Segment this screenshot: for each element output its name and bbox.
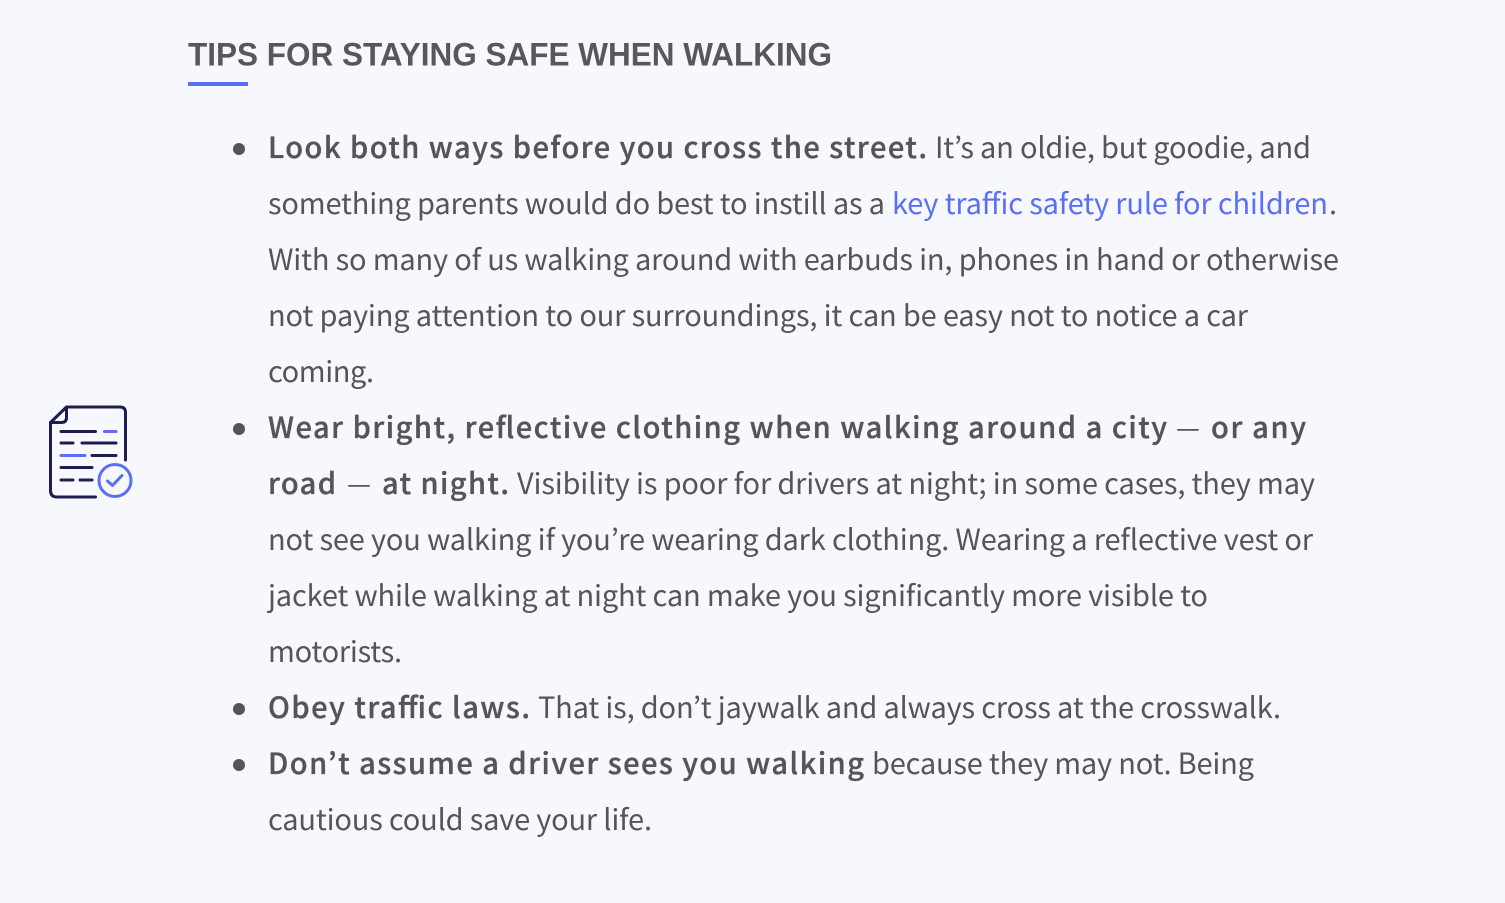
list item: don't assume: [233, 741, 1254, 839]
list item: reflective clothing: jacket while walking at night can make you significantly more visible to: [266, 573, 1208, 615]
list item: look both ways: coming.: [268, 349, 374, 391]
list item: look both ways: [233, 125, 1339, 391]
list item: look both ways: It’s an oldie, but goodie, and: [935, 125, 1311, 167]
heading: TIPS FOR STAYING SAFE WHEN WALKING: [188, 36, 832, 72]
list item: reflective clothing: —: [347, 461, 371, 503]
list item: look both ways: something parents would do best to instill as a: [268, 181, 885, 223]
list item: reflective clothing: at night.: [382, 461, 509, 503]
list item: reflective clothing: not see you walking if you’re wearing dark clothing. Wearing a reflective vest or: [268, 517, 1314, 559]
list item: reflective clothing: motorists.: [268, 629, 402, 671]
list item: obey traffic laws: That is, don’t jaywalk and always cross at the crosswalk.: [538, 685, 1281, 727]
list item: reflective clothing: or any: [1211, 405, 1306, 447]
list item: look both ways: not paying attention to our surroundings, it can be easy not to notice a car: [268, 293, 1249, 335]
bullet list: [233, 125, 1339, 839]
list item: reflective clothing: road: [268, 461, 336, 503]
list item: obey traffic laws: Obey traffic laws.: [268, 685, 530, 727]
list item: reflective clothing: [233, 405, 1315, 671]
list item: don't assume: cautious could save your life.: [268, 797, 652, 839]
list item: look both ways: .: [1329, 181, 1337, 223]
list item: reflective clothing: Visibility is poor for drivers at night; in some cases, they may: [517, 461, 1315, 503]
list item: don't assume: because they may not. Being: [872, 741, 1254, 783]
icon: document with checkmark: [50, 407, 131, 497]
list item: reflective clothing: Wear bright, reflective clothing when walking around a city: [268, 405, 1167, 447]
list item: look both ways: With so many of us walking around with earbuds in, phones in hand or otherwise: [268, 237, 1339, 279]
list item: reflective clothing: —: [1176, 405, 1200, 447]
list item: look both ways: key traffic safety rule for children: [892, 181, 1328, 223]
list item: don't assume: Don’t assume a driver sees you walking: [268, 741, 864, 783]
list item: look both ways: Look both ways before you cross the street.: [268, 125, 927, 167]
